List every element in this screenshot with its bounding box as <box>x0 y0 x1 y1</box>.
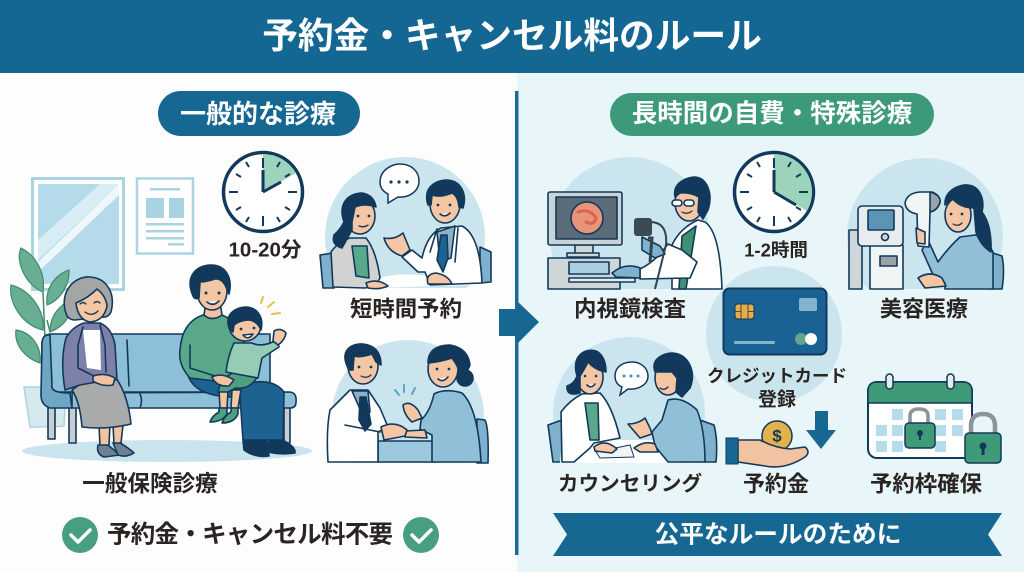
header band with title: 予約金・キャンセル料のルール <box>262 16 762 56</box>
monitor <box>548 192 622 257</box>
heading pill: general care: 一般的な診療 <box>180 99 336 129</box>
floor shadow <box>22 440 312 462</box>
endoscope device <box>634 218 666 289</box>
check icon <box>403 517 439 553</box>
label: 10-20 minutes: 10-20分 <box>229 238 302 262</box>
illustration: quick exam <box>326 340 489 464</box>
bench sofa <box>41 334 296 443</box>
machine <box>849 206 903 289</box>
clock: 1 to 2 hours <box>734 152 814 232</box>
backdrop circle <box>847 158 1003 289</box>
label: credit card registration: クレジットカード <box>707 366 847 386</box>
icon: calendar with locks <box>868 374 1001 463</box>
check banner: no fees: 予約金・キャンセル料不要 <box>107 520 393 548</box>
illustration: counseling <box>547 337 718 463</box>
illustration: endoscopy <box>547 157 723 290</box>
label: short appointment: 短時間予約 <box>350 296 462 322</box>
chairs <box>548 420 717 462</box>
arrow: down <box>806 411 836 449</box>
patient woman <box>918 185 1004 289</box>
exam table <box>378 441 435 462</box>
label: counseling: カウンセリング <box>558 472 702 496</box>
table <box>560 440 682 463</box>
label: securing slot: 予約枠確保 <box>870 472 983 496</box>
console <box>548 258 635 289</box>
check banner: no fees <box>62 517 439 553</box>
check icon <box>62 517 98 553</box>
calendar <box>868 374 972 458</box>
illustration: general insurance label: 一般保険診療 <box>82 472 218 496</box>
counselor woman <box>561 350 620 462</box>
divider line <box>515 91 518 555</box>
label: 1 to 2 hours: 1-2時間 <box>744 240 808 260</box>
credit card <box>706 266 842 402</box>
card chip <box>735 304 754 319</box>
side chair <box>477 419 488 463</box>
patient woman <box>331 193 388 289</box>
ribbon banner <box>553 513 1002 556</box>
card hologram <box>799 298 817 311</box>
clock: 10 to 20 minutes <box>224 152 302 232</box>
backdrop circle <box>553 337 705 463</box>
label: deposit: 予約金 <box>743 472 809 496</box>
backdrop circle <box>325 157 485 288</box>
panel: left background <box>0 73 517 572</box>
doctor <box>384 180 482 285</box>
coin: $ <box>772 426 782 446</box>
window <box>32 178 124 290</box>
endoscopist <box>612 177 722 289</box>
backdrop circle <box>706 266 842 402</box>
card body <box>724 288 826 354</box>
label: endoscopy: 内視鏡検査 <box>574 296 686 322</box>
speech bubble <box>380 164 419 203</box>
table top <box>378 274 470 288</box>
person: father <box>180 265 295 456</box>
heading pill: long private care: 長時間の自費・特殊診療 <box>632 100 912 128</box>
sparkle marks <box>261 297 280 314</box>
hand <box>738 440 808 467</box>
potted plant <box>11 248 71 427</box>
speech bubble <box>615 362 648 395</box>
illustration: aesthetic medicine <box>847 158 1004 290</box>
person: child waving <box>210 307 286 423</box>
icon: hand holding coin <box>726 421 808 467</box>
arrow: general to long care <box>499 301 539 344</box>
header band with title <box>0 0 1024 73</box>
heading pill: general care <box>158 91 360 136</box>
spark marks <box>395 385 415 395</box>
label: credit card registration: 登録 <box>758 388 796 410</box>
poster <box>137 178 193 254</box>
illustration: waiting room <box>11 178 312 462</box>
illustration: short-time consultation <box>319 157 492 290</box>
chairs <box>320 247 491 288</box>
small lock <box>905 409 935 448</box>
backdrop circle <box>550 157 709 289</box>
heading pill: long private care <box>610 93 934 136</box>
handheld device <box>905 192 940 247</box>
large lock <box>965 414 1001 463</box>
label: aesthetic medicine: 美容医療 <box>880 296 968 322</box>
panel: right background <box>517 73 1024 572</box>
backdrop circle <box>332 340 484 463</box>
doctor <box>327 344 407 462</box>
patient woman <box>403 345 481 462</box>
cuff <box>726 438 738 464</box>
ribbon banner: 公平なルールのために <box>655 520 901 548</box>
client man <box>628 353 705 462</box>
label: credit card registration <box>707 366 847 410</box>
person: elderly woman <box>63 277 134 457</box>
